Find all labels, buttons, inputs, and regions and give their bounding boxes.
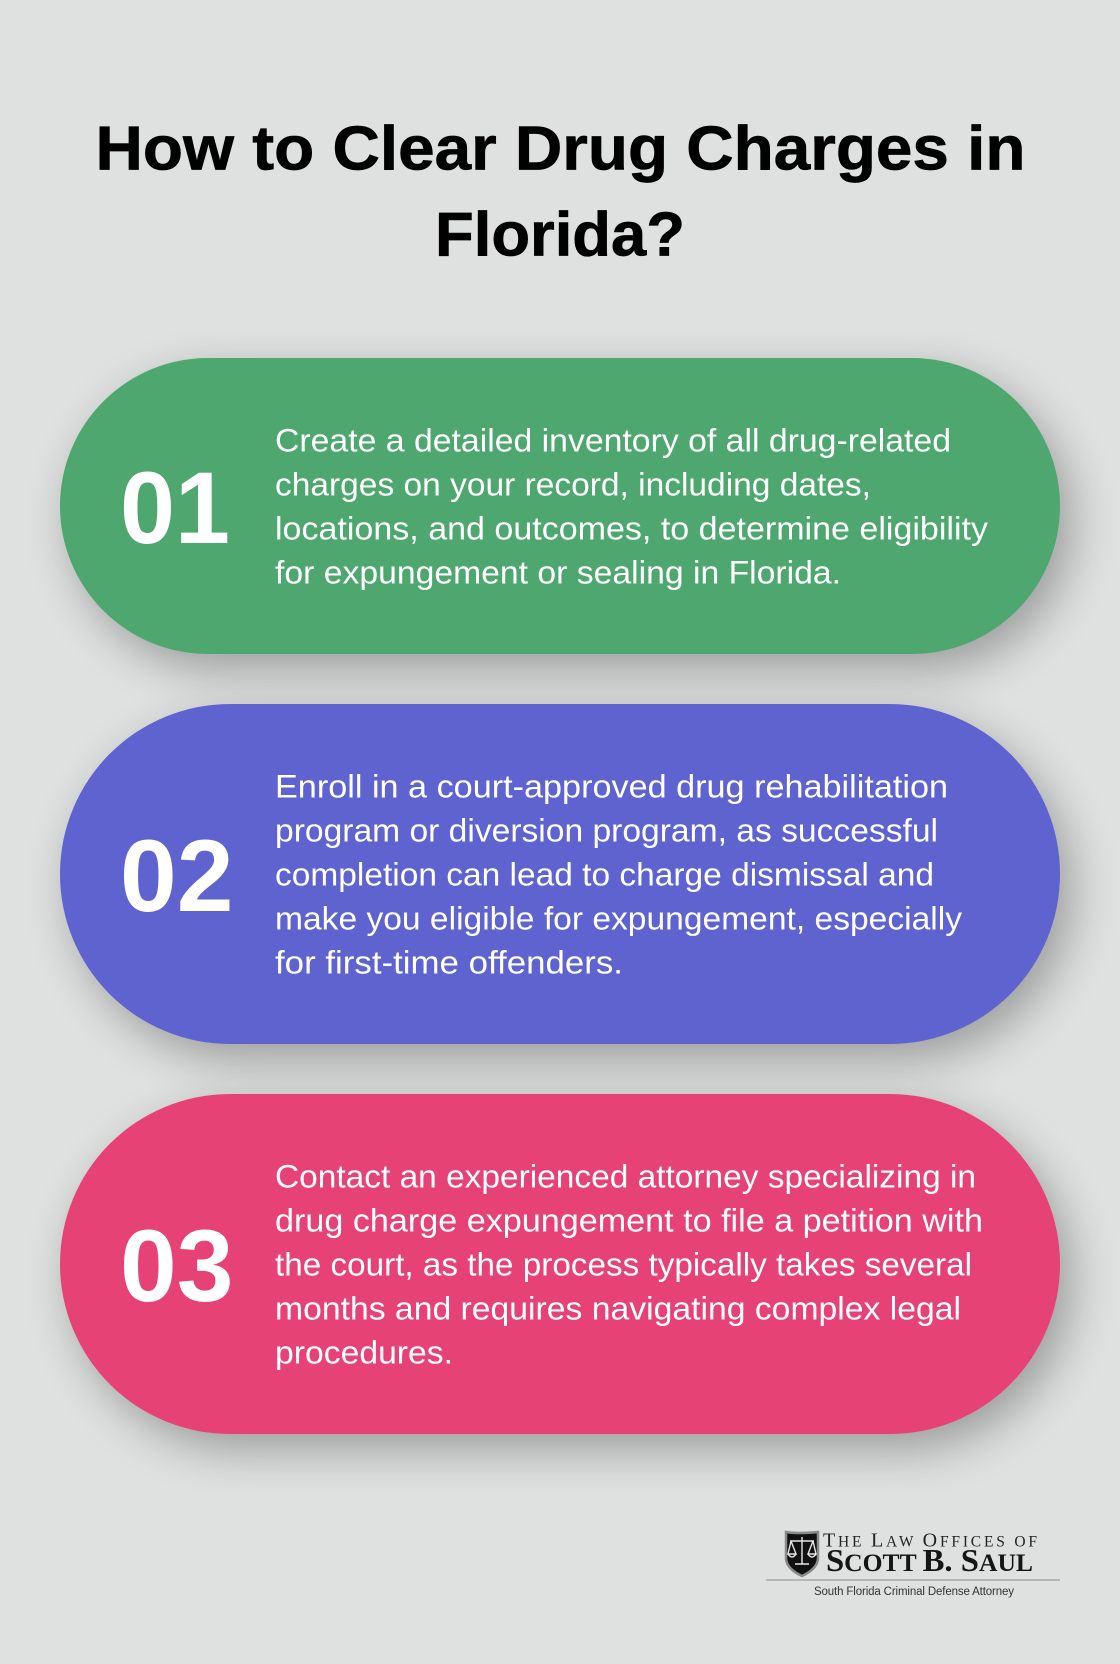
step number 02: 02 xyxy=(120,819,233,933)
panel: step 02 xyxy=(60,704,1060,1044)
step 03 text xyxy=(275,1159,983,1371)
step number 03: 03 xyxy=(120,1209,233,1323)
step 03 text: Contact an experienced attorney specializing in xyxy=(275,1159,976,1195)
step number 01: 01 xyxy=(120,451,230,565)
step 03 text: drug charge expungement to file a petition with xyxy=(275,1203,983,1239)
logo xyxy=(766,1530,1060,1598)
step 02 text: make you eligible for expungement, especially xyxy=(275,901,963,937)
step 01 text xyxy=(275,423,989,591)
icon: scales shield xyxy=(786,1532,818,1576)
step 02 text: program or diversion program, as successful xyxy=(275,813,938,849)
title: Florida? xyxy=(435,201,685,270)
step 02 text: Enroll in a court-approved drug rehabilitation xyxy=(275,769,948,805)
panel: step 03 xyxy=(60,1094,1060,1434)
step 01 text: Create a detailed inventory of all drug-related xyxy=(275,423,951,459)
step 02 text xyxy=(275,769,963,981)
step 02 text: for first-time offenders. xyxy=(275,945,623,981)
step 03 text: months and requires navigating complex legal xyxy=(275,1291,961,1327)
step 02 text: completion can lead to charge dismissal and xyxy=(275,857,934,893)
firm name: SCOTT B. SAUL xyxy=(826,1542,1033,1578)
step 03 text: procedures. xyxy=(275,1335,453,1371)
step 01 text: charges on your record, including dates, xyxy=(275,467,871,503)
title xyxy=(96,114,1025,270)
step 03 text: the court, as the process typically takes several xyxy=(275,1247,972,1283)
step 01 text: for expungement or sealing in Florida. xyxy=(275,555,841,591)
tagline: South Florida Criminal Defense Attorney xyxy=(814,1586,1014,1598)
step 01 text: locations, and outcomes, to determine eligibility xyxy=(275,511,989,547)
panel: step 01 xyxy=(60,358,1060,654)
title: How to Clear Drug Charges in xyxy=(96,114,1025,184)
firm name: THE LAW OFFICES OF xyxy=(823,1530,1037,1552)
